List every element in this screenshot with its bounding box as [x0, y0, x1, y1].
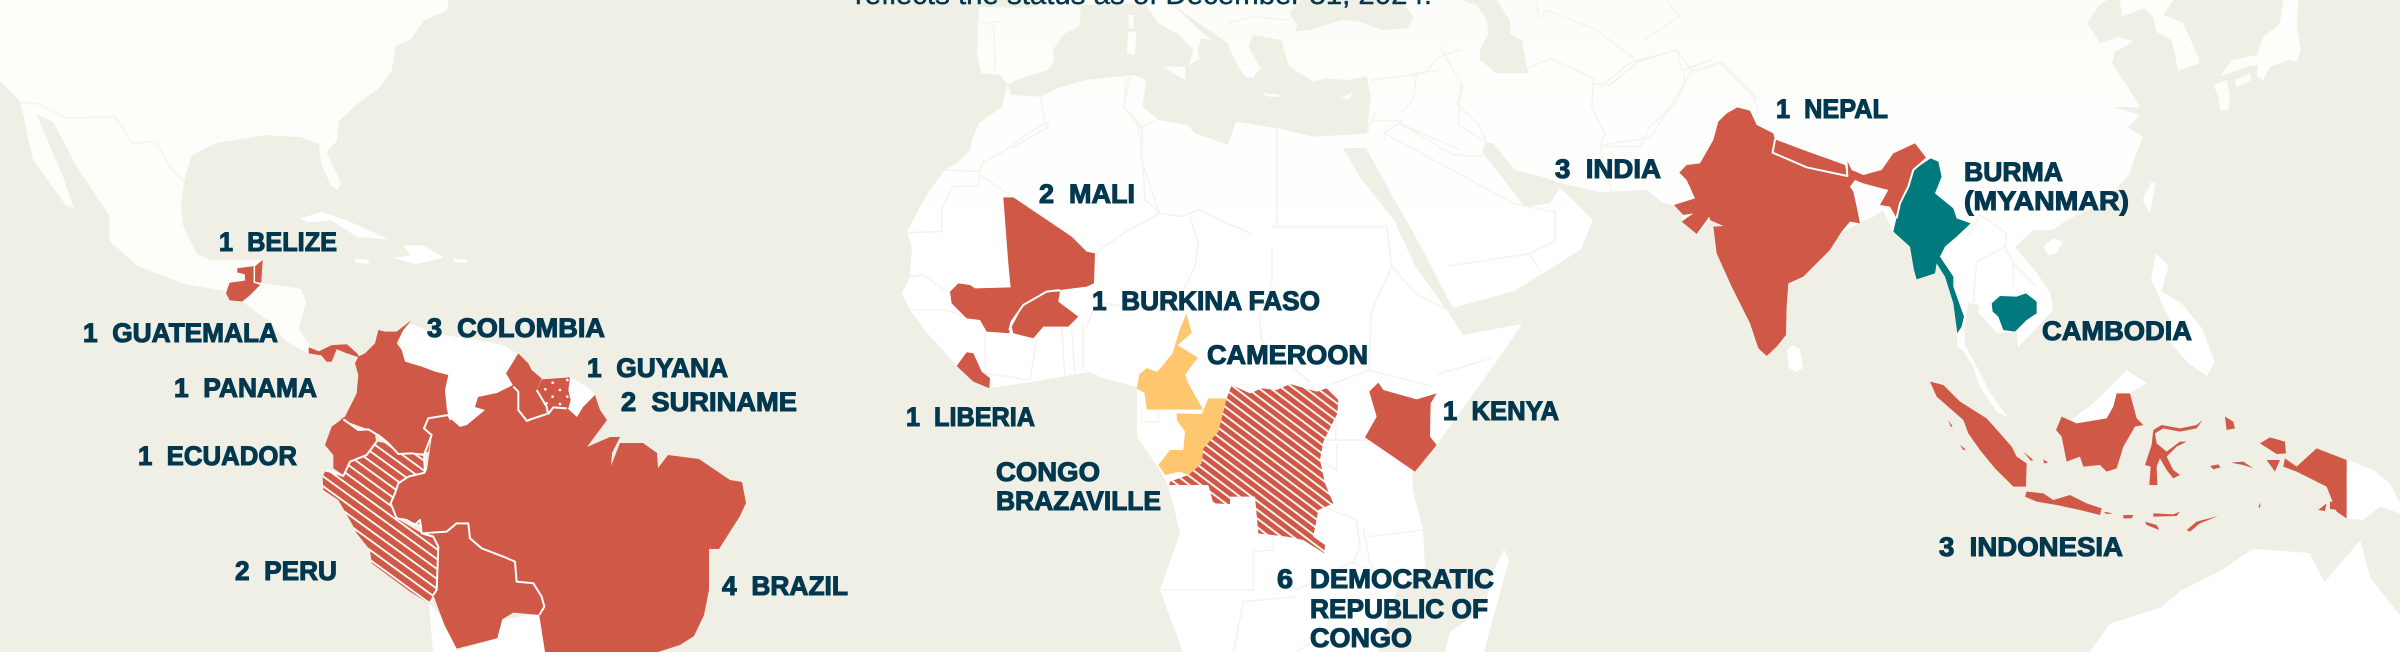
island: Madagascar — [1445, 549, 1509, 652]
Suriname (dotted) — [537, 377, 571, 414]
label: India: 3 INDIA — [1555, 154, 1661, 184]
landmass: North and Central America — [0, 0, 467, 353]
African and Middle East borders — [1124, 79, 1555, 441]
Japan, Korea, Taiwan — [2120, 0, 2301, 213]
label: Kenya: 1 KENYA — [1443, 396, 1559, 426]
label: Democratic Republic of Congo — [1277, 564, 1494, 652]
Guatemala — [226, 266, 260, 301]
label: Cambodia: CAMBODIA — [2042, 316, 2192, 346]
label: Democratic Republic of Congo: REPUBLIC OF — [1310, 594, 1488, 624]
South Asia highlighted countries — [1674, 107, 1971, 356]
Congo Brazzaville — [1158, 398, 1227, 475]
Cambodia — [1992, 293, 2037, 332]
label: Guatemala: 1 GUATEMALA — [83, 318, 278, 348]
label: Ecuador: 1 ECUADOR — [138, 441, 297, 471]
Burma (Myanmar) — [1893, 158, 1971, 333]
label: Peru: 2 PERU — [235, 556, 337, 586]
label: Burma (Myanmar): BURMA — [1964, 157, 2063, 187]
South America countries in Andean and Guiana region — [323, 320, 571, 649]
label: Indonesia: 3 INDONESIA — [1939, 532, 2123, 562]
Central and Southern African borders — [1143, 412, 1423, 652]
Nepal — [1773, 139, 1847, 176]
Kenya — [1365, 383, 1437, 472]
label: Colombia: 3 COLOMBIA — [427, 313, 605, 343]
highlighted countries: Belize and Guatemala — [226, 260, 360, 362]
label: Congo Brazaville: CONGO — [996, 457, 1100, 487]
Indonesia — [1930, 382, 2347, 532]
Bolivia — [422, 523, 544, 649]
Central Africa highlighted countries — [1137, 314, 1203, 410]
India — [1674, 107, 1927, 356]
label: Congo Brazaville — [996, 457, 1161, 516]
Cameroon — [1137, 314, 1203, 410]
label: Liberia: 1 LIBERIA — [906, 402, 1035, 432]
label: Democratic Republic of Congo: 6 — [1277, 564, 1293, 594]
label: Mali: 2 MALI — [1039, 179, 1135, 209]
label: Democratic Republic of Congo: DEMOCRATIC — [1310, 564, 1494, 594]
label: Brazil: 4 BRAZIL — [722, 571, 848, 601]
label: Burkina Faso: 1 BURKINA FASO — [1092, 286, 1320, 316]
Burkina Faso — [1012, 292, 1078, 338]
label: Congo Brazaville: BRAZAVILLE — [996, 486, 1161, 516]
landmass: South America — [397, 323, 595, 427]
Peru (hatched) — [323, 442, 438, 603]
island: Sri Lanka — [1787, 345, 1803, 372]
New Guinea and Borneo land — [2067, 370, 2400, 520]
Democratic Republic of Congo (hatched) — [1169, 384, 1338, 553]
label: Nepal: 1 NEPAL — [1776, 94, 1888, 124]
Liberia — [957, 352, 990, 388]
label: Burma (Myanmar): (MYANMAR) — [1964, 186, 2129, 216]
Belize — [255, 260, 263, 283]
label: Suriname: 2 SURINAME — [621, 387, 797, 417]
West Africa highlighted countries — [950, 197, 1095, 388]
Colombia — [341, 320, 448, 453]
Guyana — [506, 353, 547, 422]
label: Cameroon: CAMEROON — [1207, 340, 1368, 370]
seas: Caspian Sea — [1400, 0, 1758, 192]
islands and neighbouring land: Asia Pacific — [1600, 50, 2400, 652]
label: Burma (Myanmar) — [1964, 157, 2129, 216]
Mali — [950, 197, 1095, 333]
seas: Mediterranean and Black Sea — [981, 0, 1460, 150]
label: Belize: 1 BELIZE — [219, 227, 337, 257]
label: Guyana: 1 GUYANA — [587, 353, 728, 383]
Ecuador — [325, 419, 376, 475]
Panama — [309, 344, 360, 362]
label: Panama: 1 PANAMA — [174, 373, 317, 403]
Brazil — [391, 385, 746, 652]
landmass: Africa, Europe and Asia — [902, 0, 2143, 652]
West African borders — [907, 122, 1250, 380]
Indochina land detail — [1968, 215, 2063, 303]
